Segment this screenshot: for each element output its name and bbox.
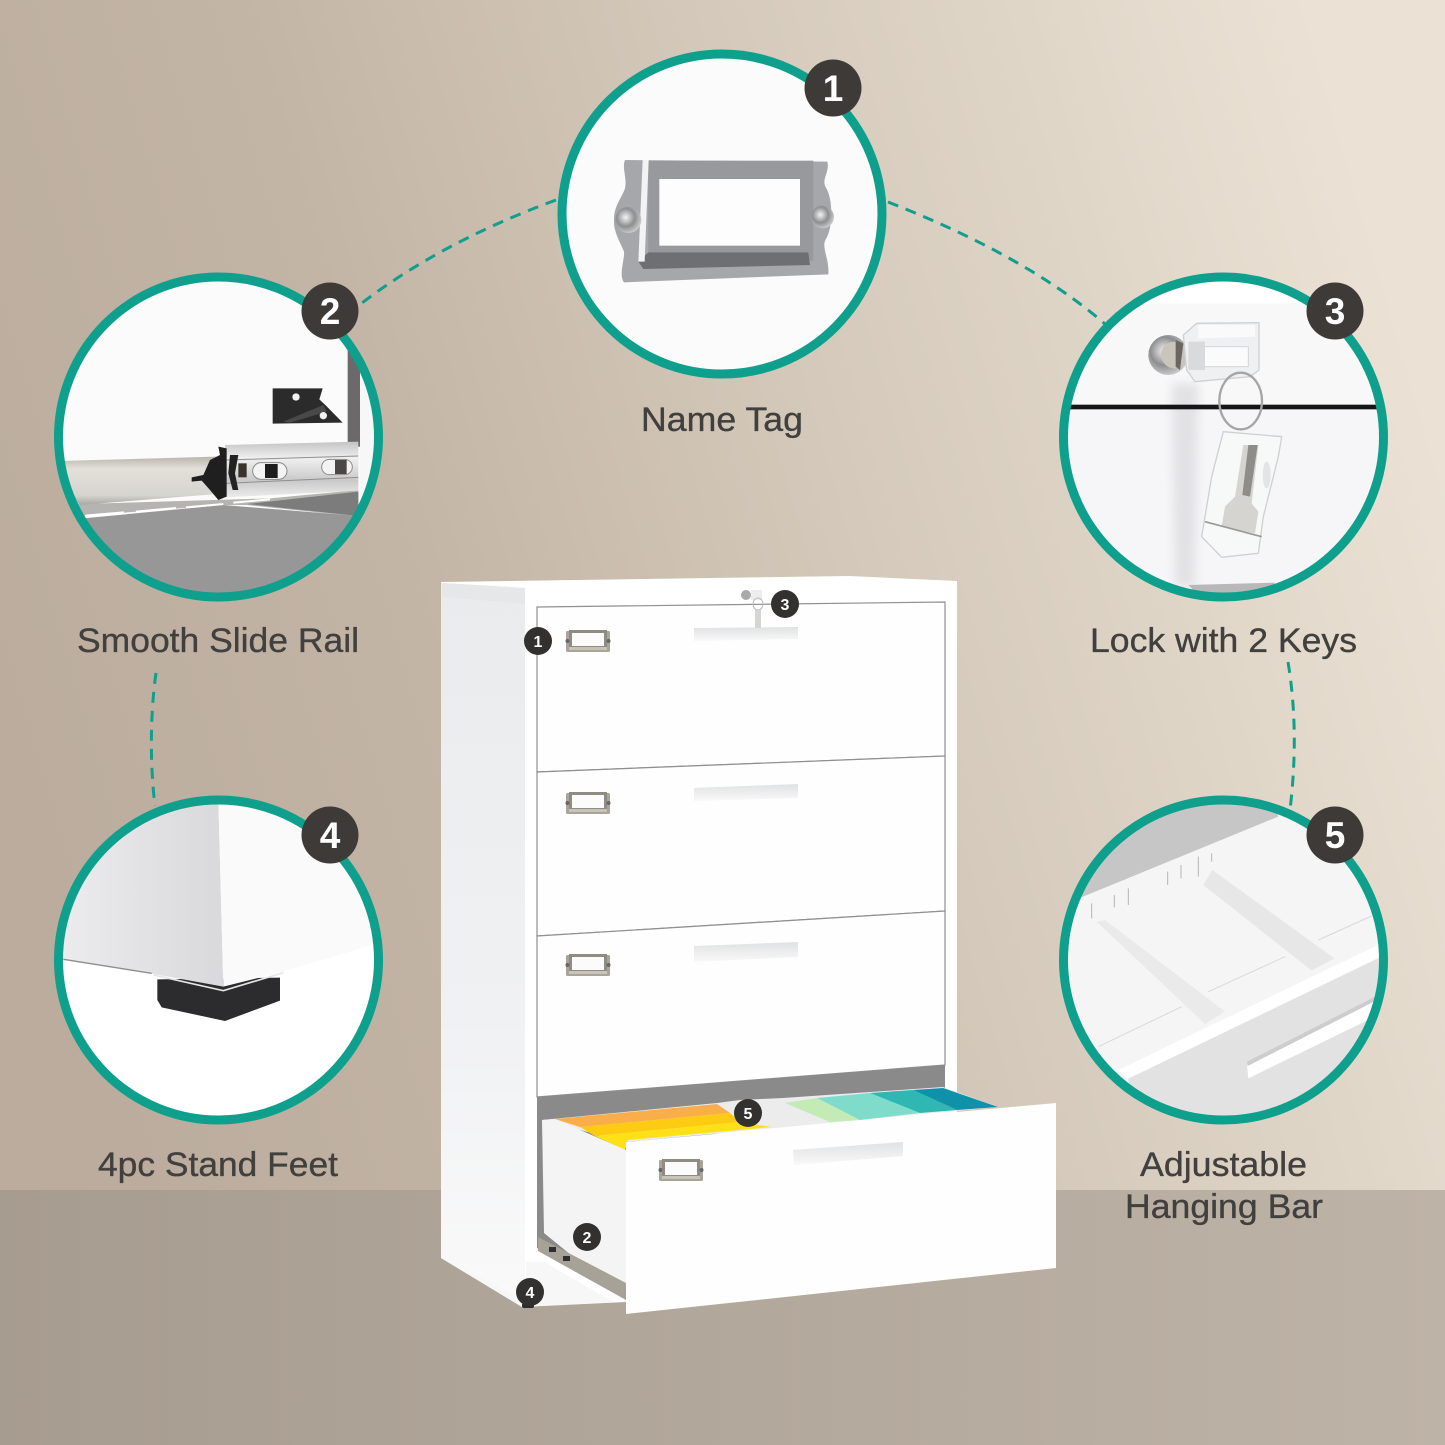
amber file folders [580, 1113, 740, 1136]
label: Name Tag: Name Tag [641, 401, 803, 439]
badge 4: 4 [320, 815, 341, 856]
small marker 4 [516, 1278, 544, 1306]
badge 1 [804, 60, 862, 116]
drawer front [626, 1103, 1056, 1314]
small marker 5: 5 [744, 1106, 753, 1123]
cabinet side panel [441, 584, 526, 1307]
small marker 4: 4 [526, 1285, 535, 1302]
filing cabinet [441, 576, 1056, 1314]
badge 5 [1306, 806, 1364, 864]
small marker 5 [734, 1099, 762, 1127]
teal ring [562, 54, 882, 374]
teal ring [1064, 277, 1384, 597]
dashed connector: lock to hanging bar [1288, 662, 1294, 810]
drawer 1 name tag [566, 630, 610, 652]
open drawer cavity [537, 1065, 945, 1298]
circle photo: name tag plate [566, 58, 878, 370]
badge 3 [1306, 282, 1364, 340]
dashed connector: name tag to slide rail [358, 200, 556, 306]
orange file folders [555, 1104, 730, 1127]
label: Lock with 2 Keys: Lock with 2 Keys [1090, 622, 1357, 660]
label: Adjustable Hanging Bar: Hanging Bar [1125, 1188, 1323, 1226]
small marker 2 [573, 1223, 601, 1251]
teal ring [58, 277, 378, 597]
background floor [0, 1190, 1445, 1445]
panel: adjustable hanging bar detail [1055, 790, 1390, 1130]
dashed connector: name tag to lock [888, 202, 1105, 324]
dashed connector: slide rail to stand feet [151, 673, 156, 806]
label: 4pc Stand Feet: 4pc Stand Feet [98, 1146, 339, 1184]
yellow file folders [595, 1122, 772, 1150]
panel: name tag detail [560, 50, 890, 380]
badge 4 [302, 806, 358, 864]
drawer 3 front [537, 911, 945, 1097]
badge 1: 1 [823, 68, 843, 109]
drawer side [542, 1119, 626, 1300]
badge 2: 2 [320, 291, 340, 332]
teal ring [58, 800, 378, 1120]
small marker 1: 1 [534, 634, 543, 651]
drawer 3 name tag [566, 954, 610, 976]
teal ring [1064, 800, 1384, 1120]
cabinet side top edge [441, 583, 525, 604]
label: Adjustable Hanging Bar: Adjustable [1140, 1146, 1307, 1184]
label: Adjustable Hanging Bar [1125, 1146, 1323, 1226]
label: Smooth Slide Rail: Smooth Slide Rail [77, 622, 359, 660]
badge 3: 3 [1325, 291, 1345, 332]
small marker 1 [524, 627, 552, 655]
cabinet base [441, 1258, 614, 1307]
small marker 3: 3 [781, 597, 790, 614]
open drawer interior [542, 1087, 998, 1150]
circle photo: cabinet foot [63, 804, 374, 1116]
drawer 2 name tag [566, 792, 610, 814]
teal file folders [870, 1090, 957, 1113]
slide rail [538, 1237, 626, 1300]
drawer 2 front [537, 756, 945, 936]
badge 2 [302, 282, 358, 340]
drawer 4 name tag [658, 1159, 704, 1181]
cabinet front frame [441, 576, 957, 1307]
circle photo: lock and keys [1068, 282, 1379, 592]
panel: smooth slide rail detail [50, 274, 385, 607]
small marker 2: 2 [583, 1230, 592, 1247]
panel: lock with keys detail [1055, 270, 1395, 604]
lock and key [741, 590, 763, 628]
cabinet foot [522, 1303, 534, 1308]
panel: stand feet detail [55, 797, 385, 1127]
small marker 3 [771, 590, 799, 618]
blue file folders [913, 1088, 998, 1110]
drawer 1 front [537, 602, 945, 772]
circle photo: hanging bars in drawer [1068, 804, 1379, 1116]
green file folders [785, 1098, 860, 1122]
aqua file folders [817, 1093, 920, 1120]
circle photo: slide rail [63, 282, 374, 592]
badge 5: 5 [1325, 815, 1345, 856]
